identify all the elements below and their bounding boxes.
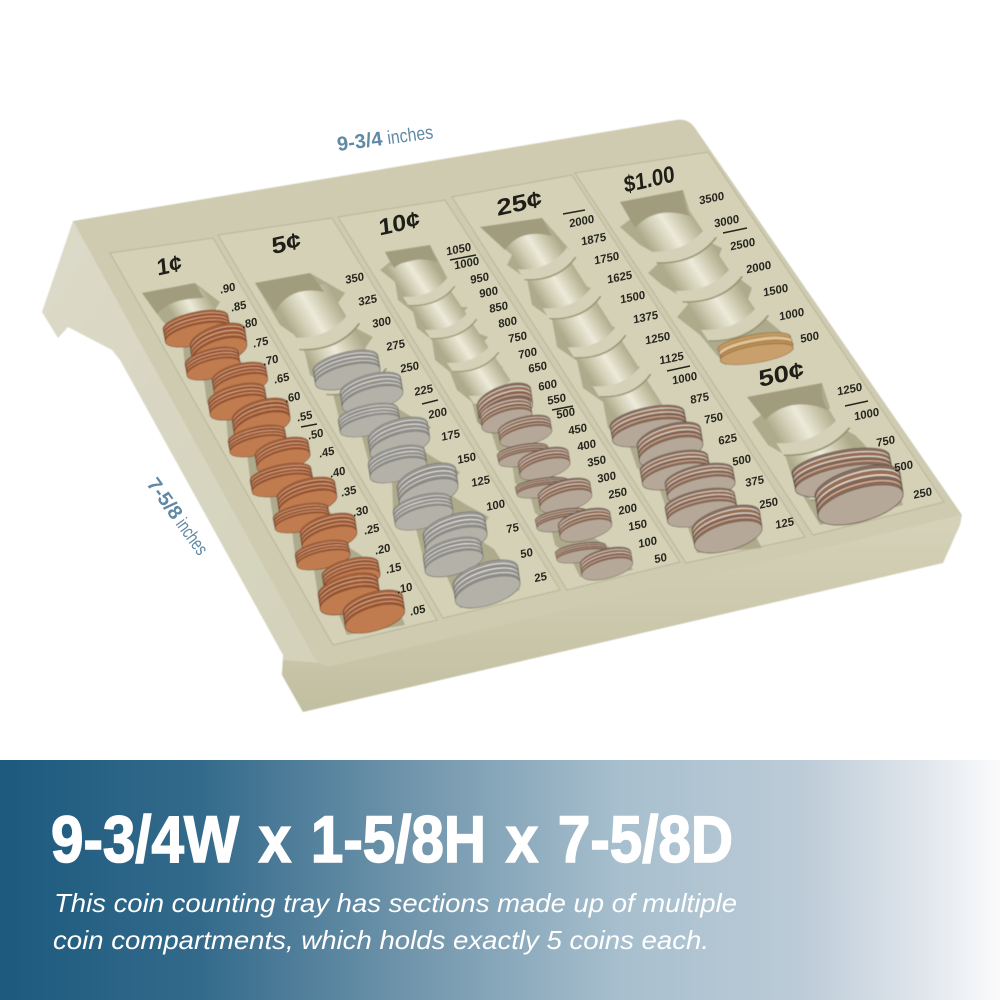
scale numbers: 1 cent: .80 <box>241 316 258 332</box>
column titles: 10¢ <box>377 206 421 241</box>
coin stack: dollar coins <box>715 328 796 369</box>
scale numbers: 10 cent: 700 <box>518 346 538 362</box>
scale numbers: 1 cent: .25 <box>363 522 381 538</box>
scale numbers: 10 cent: 400 <box>577 438 597 454</box>
scale numbers: 50 cent: 750 <box>876 434 896 450</box>
scale numbers: 5 cent: 125 <box>471 474 491 490</box>
coin tray <box>42 120 962 712</box>
panel: dollar and 50 cent column <box>575 152 944 535</box>
scale numbers: 25 cent: 250 <box>759 496 779 512</box>
scale numbers: 1 cent: .85 <box>230 299 248 315</box>
scale numbers: 1 cent <box>219 281 427 619</box>
slot top openings <box>142 190 828 420</box>
scale numbers: 10 cent: 500 <box>556 406 576 422</box>
scale numbers: 5 cent: 350 <box>345 271 365 287</box>
scale numbers: 25 cent: 500 <box>732 453 752 469</box>
scale numbers: 50 cent: 1000 <box>854 406 880 424</box>
scale numbers: 1 cent: .10 <box>396 581 413 597</box>
scale numbers: 25 cent: 750 <box>704 411 724 427</box>
scale numbers: 1 cent: .40 <box>329 465 346 481</box>
scale numbers: 5 cent: 75 <box>506 522 520 536</box>
scale numbers: 25 cent: 1000 <box>672 370 698 388</box>
scale numbers: 5 cent: 275 <box>386 338 406 354</box>
panel: 1 cent column <box>110 238 437 645</box>
scale numbers: 1 cent: .45 <box>318 445 336 461</box>
bottom banner <box>0 760 1000 1000</box>
scale numbers: 1 cent: .30 <box>352 504 369 520</box>
column titles: 25¢ <box>495 186 543 221</box>
column titles: 5¢ <box>270 228 302 260</box>
column titles <box>155 160 805 392</box>
coin stacks: dimes <box>474 377 635 585</box>
scale numbers: 1 cent: .05 <box>409 603 427 619</box>
scale numbers: 10 cent: 1000 <box>454 255 480 273</box>
scale numbers: dollar: 3000 <box>714 213 740 231</box>
scale numbers: 5 cent: 250 <box>400 360 420 376</box>
scale numbers: 5 cent: 50 <box>520 547 534 561</box>
scale numbers: 10 cent <box>446 241 668 566</box>
coin stacks: half dollars <box>787 441 907 533</box>
panel: 5 cent column <box>218 218 560 618</box>
scale numbers: 25 cent: 375 <box>745 474 765 490</box>
scale numbers: 10 cent: 850 <box>489 300 509 316</box>
scale numbers: 10 cent: 300 <box>597 470 617 486</box>
panel: 10 cent column <box>338 200 680 590</box>
scale numbers: 10 cent: 550 <box>547 392 567 408</box>
scale numbers: dollar: 1000 <box>779 306 805 324</box>
scale numbers: 50 cent: 1250 <box>837 381 863 399</box>
tray front face <box>282 515 962 712</box>
scale numbers: 5 cent: 100 <box>486 498 506 514</box>
scale numbers: 5 cent: 175 <box>441 428 461 444</box>
banner heading: 9-3/4W x 1-5/8H x 7-5/8D <box>51 802 733 876</box>
scale numbers: 10 cent: 1050 <box>446 241 472 259</box>
scale numbers: 25 cent: 125 <box>775 516 795 532</box>
panel: 25 cent column <box>452 175 805 563</box>
scale numbers: 10 cent: 200 <box>618 502 638 518</box>
banner description <box>53 888 737 955</box>
scale numbers: 25 cent: 2000 <box>569 213 595 231</box>
slot cylinders <box>161 198 885 503</box>
scale numbers: 5 cent: 25 <box>534 571 548 585</box>
scale numbers: 1 cent: .65 <box>273 371 291 387</box>
tray top face <box>73 120 962 666</box>
scale numbers: 1 cent: .55 <box>296 409 314 425</box>
scale numbers: 10 cent: 150 <box>628 518 648 534</box>
scale numbers: 25 cent: 1125 <box>659 350 685 368</box>
scale numbers: 5 cent: 150 <box>457 451 477 467</box>
scale numbers: 10 cent: 50 <box>654 552 668 566</box>
scale numbers: 25 cent <box>563 210 795 532</box>
scale numbers: 50 cent: 500 <box>894 459 914 475</box>
scale numbers: dollar: 2500 <box>730 236 756 254</box>
scale numbers: 10 cent: 650 <box>528 360 548 376</box>
scale numbers: 5 cent: 300 <box>372 315 392 331</box>
width annotation: 9-3/4inches <box>336 121 434 156</box>
scale numbers: 10 cent: 350 <box>587 454 607 470</box>
coin slots <box>142 190 903 635</box>
scale numbers: 10 cent: 750 <box>508 330 528 346</box>
scale numbers: 25 cent: 1500 <box>620 289 646 307</box>
scale numbers: dollar: 3500 <box>699 190 725 208</box>
scale numbers: 1 cent: .90 <box>219 281 236 297</box>
scale numbers: 25 cent: 1375 <box>633 309 659 327</box>
scale numbers: 5 cent: 225 <box>414 383 434 399</box>
column titles: 1¢ <box>155 249 183 281</box>
scale numbers: 1 cent: .20 <box>374 542 391 558</box>
coin stacks: nickels <box>310 345 523 615</box>
scale numbers: 5 cent: 200 <box>428 406 448 422</box>
banner description: This coin counting tray has sections made up of multiple <box>54 888 737 918</box>
scale numbers: 25 cent: 875 <box>690 391 710 407</box>
scale numbers: 10 cent: 800 <box>498 315 518 331</box>
scale numbers: 5 cent <box>345 271 548 585</box>
scale numbers: dollar: 500 <box>800 330 820 346</box>
scale numbers: 1 cent: .60 <box>284 390 301 406</box>
scale numbers: 1 cent: .15 <box>385 561 403 577</box>
scale numbers: 1 cent: .35 <box>340 484 358 500</box>
scale numbers: dollar: 2000 <box>746 259 772 277</box>
scale numbers: 5 cent: 325 <box>358 293 378 309</box>
scale numbers: 25 cent: 625 <box>718 432 738 448</box>
coin stacks: quarters <box>606 399 766 560</box>
scale numbers: 25 cent: 1875 <box>581 231 607 249</box>
scale numbers: 25 cent: 1625 <box>607 269 633 287</box>
coin stacks: pennies <box>160 305 408 639</box>
scale numbers: 1 cent: .50 <box>307 427 324 443</box>
scale numbers: 1 cent: .70 <box>262 353 279 369</box>
scale numbers: 10 cent: 600 <box>538 378 558 394</box>
scale numbers: 10 cent: 450 <box>568 422 588 438</box>
scale numbers: 10 cent: 950 <box>470 271 490 287</box>
column titles: $1.00 <box>623 160 676 198</box>
scale numbers: 1 cent: .75 <box>252 335 270 351</box>
scale numbers: 50 cent <box>837 381 933 502</box>
banner description: coin compartments, which holds exactly 5 coins each. <box>53 925 709 955</box>
scale numbers: 10 cent: 100 <box>638 535 658 551</box>
scale numbers: 10 cent: 250 <box>608 486 628 502</box>
column titles: 50¢ <box>757 357 805 392</box>
scale numbers: dollar: 1500 <box>763 282 789 300</box>
depth annotation: 7-5/8inches <box>142 474 212 559</box>
scale numbers: 25 cent: 1250 <box>645 330 671 348</box>
scale numbers: dollar <box>699 190 820 346</box>
tray side face <box>42 221 332 712</box>
scale numbers: 25 cent: 1750 <box>594 250 620 268</box>
scale numbers: 10 cent: 900 <box>479 285 499 301</box>
background <box>0 0 1000 760</box>
scale numbers: 50 cent: 250 <box>913 486 933 502</box>
